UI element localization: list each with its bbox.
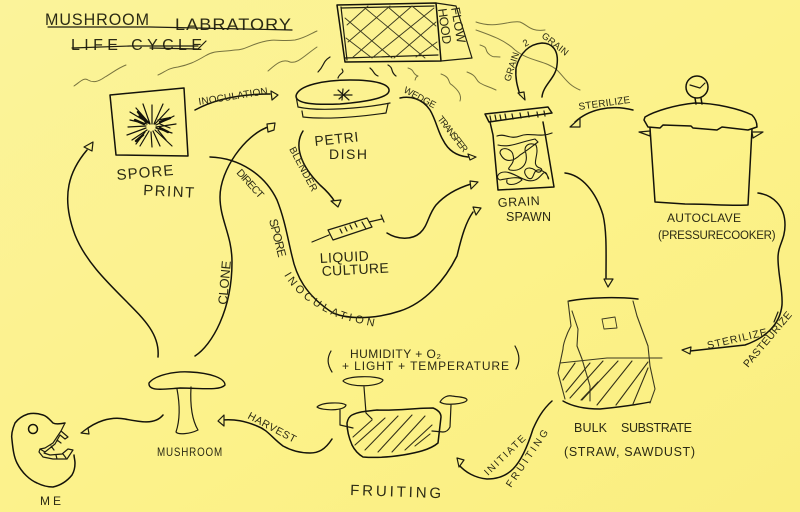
bulk substrate bbox=[558, 298, 696, 459]
arrow: liquid culture to grain spawn bbox=[387, 181, 478, 238]
arrow: wedge transfer: TRANSFER bbox=[435, 114, 470, 156]
petri dish bbox=[296, 80, 390, 162]
mushroom: MUSHROOM bbox=[157, 445, 223, 459]
me face bbox=[12, 413, 75, 508]
mushroom bbox=[149, 372, 225, 459]
title: LABRATORY bbox=[175, 15, 292, 34]
autoclave: (PRESSURECOOKER) bbox=[658, 230, 776, 242]
liquid culture syringe bbox=[312, 215, 390, 279]
flow hood: FLOW bbox=[448, 6, 468, 45]
arrow: wedge transfer: WEDGE bbox=[402, 85, 439, 112]
arrow: grain 2 grain bbox=[502, 31, 571, 100]
arrow: wedge transfer bbox=[400, 85, 476, 160]
arrow: sterilize to jar bbox=[570, 95, 633, 127]
arrow: sterilize to jar: STERILIZE bbox=[578, 95, 632, 113]
flow hood bbox=[337, 3, 472, 62]
bulk substrate: SUBSTRATE bbox=[621, 421, 693, 435]
small mushroom left bbox=[317, 403, 353, 428]
arrow: clone: CLONE bbox=[215, 259, 234, 305]
autoclave: AUTOCLAVE bbox=[667, 211, 742, 225]
spore print: PRINT bbox=[143, 182, 196, 202]
grain spawn jar: GRAIN bbox=[497, 194, 541, 210]
title bbox=[45, 10, 292, 54]
spore burst bbox=[127, 104, 176, 147]
arrow: blender bbox=[286, 131, 341, 207]
environment conditions bbox=[328, 346, 519, 373]
arrow: sterilize pasteurize: STERILIZE bbox=[706, 326, 769, 352]
background squiggles bbox=[74, 22, 580, 101]
arrow: direct spore inoculation: DIRECT bbox=[234, 167, 267, 202]
title: MUSHROOM bbox=[45, 10, 150, 29]
mycelium scribble bbox=[498, 139, 549, 184]
arrow: inoculation: INOCULATION bbox=[198, 86, 270, 108]
arrow: grain 2 grain: GRAIN bbox=[502, 50, 522, 83]
arrow: grain 2 grain: 2 bbox=[521, 37, 532, 50]
fruiting block: FRUITING bbox=[350, 482, 442, 502]
arrow: sterilize pasteurize: PASTEURIZE bbox=[741, 309, 795, 370]
arrow: initiate fruiting: INITIATE bbox=[482, 433, 529, 478]
bulk substrate: (STRAW, SAWDUST) bbox=[564, 445, 696, 459]
arrow: harvest: HARVEST bbox=[246, 410, 299, 446]
petri dish: DISH bbox=[329, 146, 368, 162]
environment conditions: HUMIDITY + O₂ bbox=[350, 347, 442, 361]
liquid culture syringe: LIQUID bbox=[319, 247, 370, 266]
me face: ME bbox=[40, 494, 62, 508]
arrow: clone bbox=[195, 123, 275, 356]
title: LIFE CYCLE bbox=[71, 37, 203, 54]
petri dish: PETRI bbox=[314, 128, 360, 149]
arrow: sterilize pasteurize bbox=[682, 193, 795, 370]
arrow: spore print return bbox=[68, 142, 158, 357]
autoclave bbox=[639, 76, 776, 242]
flow hood: HOOD bbox=[435, 7, 454, 46]
grain spawn jar bbox=[485, 107, 554, 224]
icon: colony star bbox=[334, 89, 352, 100]
small mushroom top bbox=[343, 377, 383, 419]
pressure gauge bbox=[686, 76, 708, 104]
arrow: direct spore inoculation bbox=[209, 156, 482, 326]
arrow: initiate fruiting bbox=[457, 401, 552, 490]
bulk substrate: BULK bbox=[574, 421, 608, 435]
spore print bbox=[110, 88, 196, 202]
small mushroom right bbox=[432, 396, 467, 432]
spore print: SPORE bbox=[116, 162, 175, 184]
environment conditions: + LIGHT + TEMPERATURE bbox=[342, 359, 510, 373]
arrow: initiate fruiting: FRUITING bbox=[504, 427, 552, 490]
arrow: mushroom to me bbox=[81, 415, 163, 434]
arrow: harvest bbox=[218, 410, 332, 453]
fruiting block bbox=[317, 377, 467, 502]
liquid culture syringe: CULTURE bbox=[321, 259, 390, 279]
teeth bbox=[39, 423, 73, 459]
arrow: blender: BLENDER bbox=[286, 145, 320, 195]
arrow: direct spore inoculation: INOCULATION bbox=[284, 272, 374, 326]
grain spawn jar: SPAWN bbox=[506, 210, 552, 224]
arrow: grain spawn to bulk substrate bbox=[565, 173, 613, 287]
arrow: direct spore inoculation: SPORE bbox=[266, 217, 289, 260]
arrow: grain 2 grain: GRAIN bbox=[539, 31, 571, 59]
